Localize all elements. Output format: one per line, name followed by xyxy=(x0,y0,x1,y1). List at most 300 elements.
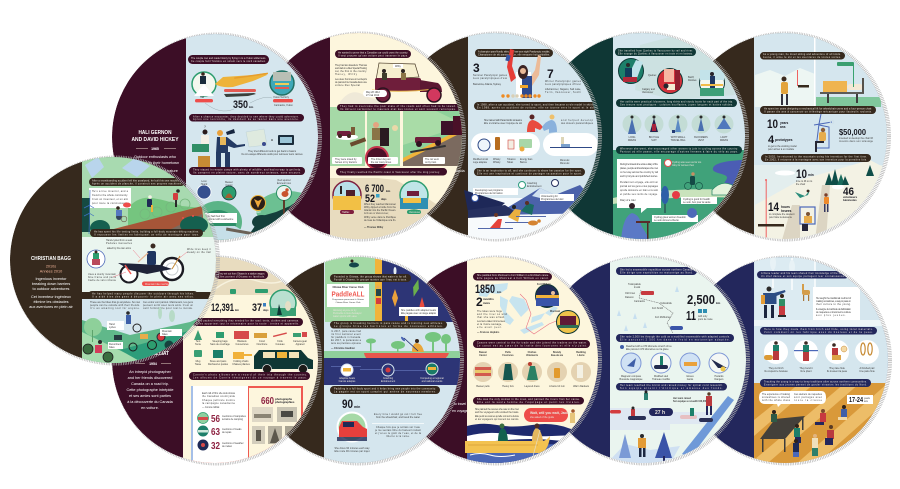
station wagon xyxy=(254,350,313,374)
stat: 2 months: months xyxy=(483,297,494,301)
dark panel description xyxy=(126,370,174,410)
heading pill 2 xyxy=(189,114,304,122)
dark panel description: Cette photographe intrépide xyxy=(126,388,174,392)
heading pill 1: Elle voyage du Québec à Vancouver en train et en bateau. xyxy=(618,52,693,56)
heading pill 1: Il veut prouver qu'une voiture peut traverser le pays. xyxy=(338,54,408,58)
album counts: mentions of campsites xyxy=(222,415,247,418)
date callout: May 28 1912 xyxy=(366,91,380,94)
stat: 12,391 km: km xyxy=(235,308,240,312)
dark panel text: Cross-country pioneers xyxy=(275,132,315,136)
artefact labels: Fourrures xyxy=(502,354,514,357)
stat: 17-24: years xyxy=(864,397,871,400)
artefact labels: Pelts xyxy=(505,351,512,354)
speech bubble: Ces ateliers de raquettes xyxy=(794,393,823,396)
heading pill 3 xyxy=(336,168,447,176)
packed item labels row 2: Chaises pliantes xyxy=(232,363,251,366)
description: aux aventures en plein air xyxy=(29,305,73,309)
companion xyxy=(778,294,786,317)
panel: circle I, voyageur canoe route xyxy=(392,255,603,467)
intro paragraph: car, the first in the country. xyxy=(335,70,367,73)
heading pill 3: Wherever she went, she encouraged other women to join in cycling across the country. xyxy=(620,148,738,150)
icon caption: They tried different tools to get back to basics xyxy=(248,150,297,153)
description: to outdoor adventures xyxy=(33,287,70,291)
mountain bike diagram xyxy=(118,244,183,282)
timeline captions: Coaching xyxy=(383,377,394,380)
callout labels: Hand xyxy=(109,323,115,326)
timeline captions: Entraînement xyxy=(381,380,396,383)
callout labels: Recumbent xyxy=(109,343,122,346)
map labels: Quebec xyxy=(648,74,657,77)
heading pill 2 xyxy=(760,327,877,334)
annotations: Hand-cycled from a seat xyxy=(106,239,132,242)
heading pill 3: They finally reached the Pacific coast in Vancouver after the long journey. xyxy=(340,171,440,174)
packed item labels row 2: Folding chairs xyxy=(234,360,249,363)
stat: 2 months: 2 xyxy=(476,295,483,309)
intro paragraph: Les deux hommes ont entrepris xyxy=(335,78,368,81)
stat: 14 hours: to complete the descent xyxy=(769,213,795,216)
medal dots row xyxy=(501,94,541,98)
wheelchair rider xyxy=(116,206,127,222)
heading pill 3: Elle est la seule femme de l'équipage et peint les rivières. xyxy=(477,401,580,404)
heading pill 2 xyxy=(474,102,598,110)
heading pill 2: Ils doivent surmonter le mauvais état des routes et sont souvent remorqués. xyxy=(340,108,456,111)
paddler in canoe xyxy=(364,336,449,360)
step captions: A finished pair xyxy=(859,367,875,370)
heading pill 1 xyxy=(615,48,696,56)
side text: En 2017, le paracanoë a xyxy=(331,339,362,342)
kayaks on river xyxy=(392,267,424,315)
bottom caption xyxy=(334,447,370,453)
title: CHRISTIAN BAGG xyxy=(31,256,71,262)
stat: 52 days: days xyxy=(381,198,387,201)
white pill: equipment items xyxy=(471,133,540,156)
heading pill 1: Elles partent d'Ottawa en familiale. xyxy=(218,276,265,278)
speech bubble xyxy=(759,391,826,407)
journal quote: The lakes were huge xyxy=(477,310,503,313)
dark panel text xyxy=(275,132,315,184)
outfit circles row xyxy=(622,114,734,134)
packed item labels row 1: Knife xyxy=(277,340,283,343)
side text: In 2017, para canoe had xyxy=(331,330,362,333)
dark panel title: AND DAVID HICKEY xyxy=(132,137,179,143)
intro text: making snowshoes, a way to pass on xyxy=(816,300,852,303)
stat: 10 years: ans xyxy=(780,125,786,129)
paragraph: Elle peint les scènes qu'elle voit sur la rivière xyxy=(475,415,520,418)
album counts: 63 xyxy=(211,427,220,438)
quote speech box: Diary of a rider xyxy=(620,199,636,202)
route line xyxy=(520,294,571,334)
couple with sign xyxy=(192,125,245,167)
route map: Carmacks xyxy=(634,300,646,303)
llama or caribou xyxy=(802,284,810,301)
step captions xyxy=(764,367,875,373)
heading pill 1 xyxy=(757,271,849,278)
intro text: went back to their hometown xyxy=(131,161,179,165)
outfit labels: DRESS xyxy=(720,139,729,142)
stat: 12,391 km: 12,391 xyxy=(211,302,234,314)
stat: 11 days: with only xyxy=(698,315,708,318)
start and end pills xyxy=(340,210,421,214)
red quote pill and figure xyxy=(524,408,575,423)
heading pill 3: Connie's photo albums are a record of their trip through the country. xyxy=(193,374,307,376)
stat: 4 prototypes: prototypes xyxy=(775,138,793,142)
stat: 7 winter games: Turin, Vancouver, Sochi xyxy=(545,91,581,94)
heading pill 1 xyxy=(473,273,552,280)
small caption: Elle parcourt 470 kilomètres sur la glace xyxy=(626,348,669,351)
packed item labels row 2: Stove and pans xyxy=(210,360,227,363)
panel 3 car on rail flatbed xyxy=(410,116,465,153)
journal quote: et la rivière sauvage, xyxy=(477,323,502,326)
heading pill 2: Le canot est au cœur de la traite des fourrures et elle s'y joint. xyxy=(477,344,587,348)
cyclist xyxy=(684,172,702,190)
panel 1 car in mud xyxy=(336,127,366,147)
city blocks xyxy=(85,157,150,178)
animal labels: Huard xyxy=(201,183,208,186)
intro text: Il enseigne la méthode de fabrication xyxy=(816,308,852,311)
dark panel text: en voyage xyxy=(452,409,468,413)
green hills xyxy=(82,307,217,367)
stat: 4 prototypes: pour arriver à un modèle xyxy=(768,148,795,151)
heading pill 3: In 2002, he returned to the mountain using his invention for the first time. xyxy=(765,156,867,158)
heading pill 3: Il a aidé bien des gens à découvrir le plein air avec ses vélos. xyxy=(92,296,194,298)
skiers xyxy=(478,201,546,229)
quotes: These are the bikes that go anywhere. So now xyxy=(90,301,140,304)
stat: 10 minutes: the chair xyxy=(796,183,805,186)
dark panel title xyxy=(132,130,179,143)
outfit labels: TRAVEL BAG xyxy=(671,139,686,142)
stat: 350 km with route arcs: km xyxy=(249,105,254,109)
heading pill 2 xyxy=(616,334,734,342)
heading pill 2: She rode 2,500 km through the cold on a modified snowmobile with adapted controls. xyxy=(620,336,730,338)
date callout xyxy=(363,90,387,97)
labelled boxes: Cycling was seen as far too xyxy=(672,161,702,164)
packed items row 1 xyxy=(194,330,307,340)
photo thumbnails xyxy=(252,407,298,444)
side text xyxy=(331,330,362,350)
explorer pointing xyxy=(761,286,786,318)
Great Lakes map xyxy=(478,283,558,334)
route marker labels xyxy=(230,289,268,294)
item captions: Energy bars xyxy=(520,158,533,161)
dark panel text: on the first road trip xyxy=(279,149,311,153)
paragraph: and the voyageurs who worked the boats. xyxy=(475,411,519,414)
pine trees xyxy=(825,165,874,185)
stat: 10 minutes: min xyxy=(808,173,814,177)
equipment circles xyxy=(621,353,729,373)
dark panel title and date: 1954 xyxy=(149,362,157,366)
flying skier xyxy=(795,190,810,198)
artefact labels: Bedding xyxy=(576,351,586,354)
packed item labels row 1: Nourriture xyxy=(257,343,268,346)
heading pill 2: Canoes were central to the fur trade and she joined the traders on the water. xyxy=(477,342,587,344)
clouds xyxy=(775,170,844,190)
white pill: sit-ski xyxy=(543,133,598,156)
heading pill 1 xyxy=(335,50,411,58)
panel 2 driver close-up xyxy=(366,122,398,169)
annotations: Uses a sturdy mountain xyxy=(88,273,117,276)
riders on trail xyxy=(83,311,174,362)
panel: circle D, traveller through Canada xyxy=(568,32,749,242)
stat: 46: bénévoles xyxy=(843,198,857,202)
stat: 4 prototypes: to get to the working model xyxy=(768,145,797,148)
quote speech box: journal sur les gens et les paysages xyxy=(619,185,659,188)
item captions: Mono-ski xyxy=(560,160,570,162)
handshake illustration xyxy=(527,114,557,133)
trip text: Atlantic into the Pacific Ocean. xyxy=(364,209,396,212)
equipment captions: Gloves xyxy=(686,375,695,378)
stat: 14 hours: hours xyxy=(781,205,790,209)
heading pill 2: Her outfits were practical: bloomers, long skirts and sturdy boots for each part of the trip. xyxy=(620,100,733,104)
dark panel description: en voiture. xyxy=(141,406,159,410)
heading pill 1: As a young man, he loved skiing and adventure of all kinds. xyxy=(763,53,841,56)
heading pill 1 xyxy=(188,55,269,64)
quote speech box: qu'elle découvre en train et à vélo xyxy=(620,189,659,192)
panel captions: horses or by tractors xyxy=(335,161,358,164)
intro text xyxy=(816,297,852,317)
packed item labels row 1: Blankets xyxy=(237,340,247,343)
dark panel text: across Canada by car xyxy=(277,155,314,159)
journal quote: that she was afraid. xyxy=(477,316,505,319)
packed item labels row 1: Camera gear xyxy=(293,340,307,343)
animal labels: Beaver xyxy=(225,181,233,184)
text callouts: Programmes de loisir xyxy=(541,198,564,201)
packed item labels row 1: Appareil xyxy=(296,343,305,346)
callout labels xyxy=(107,321,182,349)
stat: 14 hours xyxy=(768,202,794,218)
stat: 2,500 km: km xyxy=(716,301,721,305)
stat: 1850 km: km xyxy=(497,290,502,294)
artefact captions: Heavy furs xyxy=(502,385,515,388)
speech bubble: The experience of making xyxy=(762,393,791,396)
annotations: Wide tires keep it xyxy=(187,248,211,251)
scattered pine marks xyxy=(617,286,679,331)
labelled boxes: Cycling is good for health xyxy=(683,198,711,201)
panel captions: the car many times xyxy=(371,161,392,164)
heading pill 2: They packed everything they needed for the road: tents, clothes and cameras. xyxy=(196,320,299,322)
packed item labels row 1 xyxy=(195,340,307,346)
ski mountains scene xyxy=(464,185,605,244)
comic band of three panels xyxy=(330,107,465,168)
item captions: Mono-ski xyxy=(560,163,570,165)
quotes xyxy=(90,301,194,310)
intro paragraph: They had two travellers: Thomas xyxy=(335,64,368,67)
heading pill 2 xyxy=(192,318,303,326)
labelled boxes: Le vélo donne la liberté xyxy=(654,219,679,222)
text callouts: Coaching xyxy=(527,182,538,185)
heading pill 2: Le groupe brise les barrières et forme de nouveaux athlètes. xyxy=(334,325,443,328)
quotes: outil formidable pour tout le monde. xyxy=(143,307,193,310)
helper text: She trained with Para-Nordic ski teams xyxy=(484,119,523,122)
artefact captions xyxy=(476,385,590,388)
text callouts: Entraînement xyxy=(527,185,542,188)
stat: 11 days: jours de route xyxy=(697,318,713,321)
stat: 7 winter games: Jeux paralympiques d'hiver xyxy=(545,83,581,86)
heading pill 1 xyxy=(330,274,411,282)
skier on lift chair illustration xyxy=(781,70,809,105)
panel: circle G, road trip photographer xyxy=(112,255,321,465)
album counts xyxy=(198,412,247,452)
waves and water xyxy=(467,424,603,467)
route map: Old Crow xyxy=(625,292,635,295)
side text: — Christine Gauthier xyxy=(331,347,355,350)
heading pill 2 xyxy=(473,340,590,348)
white caption box xyxy=(399,307,438,322)
packed item labels row 1: Sleeping bags xyxy=(212,340,228,343)
three cyclists climbing xyxy=(140,199,190,219)
heading pill 3: She is an inspiration to all, and she continues to share her passion for the sport. xyxy=(477,170,582,172)
dark panel title and date xyxy=(131,351,171,366)
heading pill 2: Voici comment on les fabrique avec du bouleau et de la peau. xyxy=(764,331,873,334)
album counts: de repas xyxy=(222,431,232,434)
Vancouver circle xyxy=(400,181,428,209)
stat: 7 winter games: 7 xyxy=(547,67,554,81)
packed item labels row 2: Mug xyxy=(196,360,201,363)
heading pill 1: After a snowboarding accident left him paralysed, he built his own machines. xyxy=(92,180,182,182)
panel: circle C, para-Nordic skier xyxy=(427,32,602,242)
pale mint section xyxy=(82,237,217,292)
outfit labels: BICYCLE xyxy=(649,136,660,139)
red car circle xyxy=(336,412,368,442)
helper text: des skieurs paranordiques xyxy=(561,122,594,125)
heading pill 3: She was the only woman in the crew, and painted the rivers from her canoe. xyxy=(477,398,580,401)
decade: 2010s xyxy=(46,264,56,268)
quote speech box: During her travels she wrote a diary of the xyxy=(620,163,659,166)
timeline captions xyxy=(339,377,444,383)
outfit labels: LIGHT xyxy=(720,136,728,139)
step captions: They lace hide xyxy=(829,367,845,370)
French quote: et j'ai eu le goût de l'eau, et de la xyxy=(375,432,422,435)
outfit labels xyxy=(628,136,728,141)
red location pills xyxy=(195,96,293,107)
journal quote: elle avait peur. xyxy=(477,326,502,329)
stat: 4 prototypes: 4 xyxy=(768,134,775,146)
heading pill 1 xyxy=(215,271,268,279)
album text: Each roll of film she took shows xyxy=(202,392,236,395)
canoe and paddlers xyxy=(465,424,550,460)
animal labels: Loon xyxy=(201,180,207,183)
red location pills: Hali xyxy=(200,96,205,99)
vintage car xyxy=(372,63,442,102)
small caption xyxy=(620,345,672,351)
text on green: water sports with ease xyxy=(333,315,357,318)
outfit labels: SUIT xyxy=(651,139,657,142)
table and students xyxy=(760,405,847,457)
packed item labels row 2: Réchaud et poêles xyxy=(208,363,229,366)
panel: circle K, snowshoe makers xyxy=(682,255,891,475)
foliage xyxy=(82,190,208,236)
map place labels: Fort William xyxy=(537,283,551,286)
icon caption: Ils ont essayé différents outils pour retrouver leurs racines xyxy=(241,153,303,156)
decade: Années 2010 xyxy=(40,270,62,274)
heading pill 3 xyxy=(189,167,305,175)
heading pill 3 xyxy=(189,372,310,380)
artefact circles xyxy=(473,362,591,382)
panel text in dark band: Canada xyxy=(451,169,466,173)
route map: Tuktoyaktuk xyxy=(628,283,642,286)
album text xyxy=(202,392,236,409)
heading pill 2 xyxy=(616,99,737,107)
heading pill 2: Elle parcourt 2 500 km dans le froid en motoneige adaptée. xyxy=(620,338,730,342)
dark panel text: to travel xyxy=(454,402,466,406)
route map: Yellowknife xyxy=(660,302,673,305)
lower sky section xyxy=(82,299,217,367)
labelled boxes: Cycling gives women freedom xyxy=(654,216,686,219)
heading pill 3: La pagaie est un sport complet qui amène de nouveaux membres. xyxy=(334,390,436,394)
quotes: people can be outside with their friends. xyxy=(90,304,140,307)
heading pill 1: Founded in Ottawa, the group shows that water is for all. xyxy=(334,276,407,278)
album counts: mentions of weather xyxy=(222,442,244,445)
speech bubble: snowshoes is shared xyxy=(762,396,791,399)
item captions: Luge adaptée xyxy=(473,161,488,164)
dark panel text: le premier voyage xyxy=(280,168,310,172)
labelled boxes: risky for women then xyxy=(672,164,695,167)
step captions: Une paire finie xyxy=(859,370,875,373)
dark panel text xyxy=(452,402,468,413)
stat: 660 photographs xyxy=(261,395,295,407)
heading pill 3: Enseigner aux jeunes permet de garder vivantes les traditions du Nord. xyxy=(764,384,867,386)
item captions: Tobacco xyxy=(507,159,516,161)
packed item labels row 1: Tente xyxy=(195,343,202,346)
cyclist 2 xyxy=(147,195,153,212)
speech label xyxy=(393,64,403,68)
heading pill 2 xyxy=(760,106,876,114)
stat: 3 Paralympic games: Jeux paralympiques d'été xyxy=(473,77,508,80)
album counts: 56 xyxy=(211,414,220,425)
heading pill 2 xyxy=(330,321,447,328)
trip text: Arrivés à Vancouver, xyxy=(364,212,389,215)
white callout with quote: friend to the whole community. xyxy=(92,194,128,197)
trek snow scene xyxy=(610,396,734,464)
stat: 10 years: years xyxy=(780,121,789,125)
artefact captions: A barrel of rum xyxy=(549,385,565,388)
heading pill 2: After a chance encounter, they decided to see where they could adventure. xyxy=(193,116,299,118)
heading pill 1: Elle dirige une expédition en motoneige au Nord. xyxy=(620,272,693,274)
side text: for paddlers in Canada. xyxy=(331,336,361,339)
annotation lines xyxy=(113,250,187,277)
quote speech box: places, people and landscapes she met xyxy=(620,167,658,170)
speech bubble: toute la classe xyxy=(794,399,823,402)
standing helper xyxy=(824,193,829,212)
quote speech box xyxy=(617,159,661,213)
packed item labels row 1: Food xyxy=(259,340,265,343)
PaddleALL white card: Programme paracanoë à Ottawa xyxy=(332,298,365,301)
artefact labels: Castor xyxy=(479,354,487,357)
heading pill 1: A Dene leader and his team shared their knowledge of the land. xyxy=(761,272,845,275)
description: Cet inventeur ingénieux xyxy=(31,295,71,299)
equipment captions xyxy=(620,375,724,381)
heading pill 1: Jeune, il aime le ski et les aventures de toutes sortes. xyxy=(763,56,841,59)
intro paragraph xyxy=(335,64,368,87)
album text: Chaque pellicule montre xyxy=(202,399,236,402)
river and bridge xyxy=(712,160,742,196)
heading pill 3 xyxy=(88,291,198,299)
quote speech box: et publie ses récits de voyage. xyxy=(620,193,658,196)
heading pill 3 xyxy=(616,383,727,390)
description: Ingenious inventor xyxy=(35,277,67,281)
album counts: terrains de camping xyxy=(222,418,244,421)
standing figure in parka xyxy=(638,434,646,457)
shore trees xyxy=(366,332,451,352)
stat: 17-24: 17-24 xyxy=(849,397,863,404)
heading pill 1: A champion para-Nordic skier, she has won eight Paralympic medals. xyxy=(478,50,550,54)
flag bearers xyxy=(644,390,712,415)
stat: 46 xyxy=(843,188,858,201)
animal labels xyxy=(201,179,292,187)
quotes: peuvent sortir avec leurs amis. C'est un xyxy=(143,304,194,307)
couple with sign: ? xyxy=(204,125,206,129)
description: élimine les obstacles xyxy=(33,300,69,304)
panel: circle E, accessible chair lift xyxy=(712,32,891,242)
